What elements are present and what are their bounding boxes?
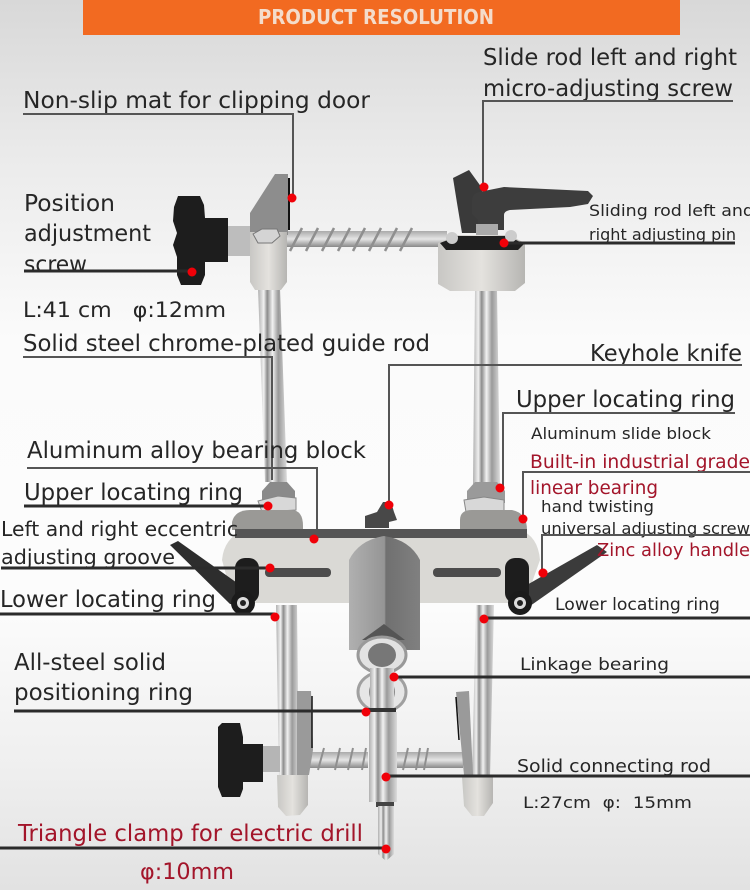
bottom left knob — [218, 723, 280, 797]
right nut stack — [460, 482, 527, 530]
label: zinc alloy handle — [538, 540, 750, 578]
top right slide block — [438, 230, 525, 291]
callout: linear bearing: Built-in industrial grade — [530, 451, 750, 473]
callout: lower locating ring right — [480, 595, 750, 624]
callout: upper locating ring right: Upper locating ring — [516, 387, 735, 413]
header banner — [83, 0, 680, 35]
callout: sliding rod pin: right adjusting pin — [589, 225, 736, 244]
callout: lower locating ring right: Lower locating ring — [555, 595, 720, 615]
callout: solid connecting rod — [382, 756, 750, 782]
spec: upper rod size: L:41 cm φ:12mm — [23, 298, 226, 322]
bottom right clamp and foot — [456, 691, 493, 816]
callout: guide rod: Solid steel chrome-plated guide rod — [23, 331, 430, 357]
left nut stack — [232, 482, 303, 530]
callout: lower locating ring left: Lower locating ring — [0, 587, 216, 613]
central column — [349, 536, 420, 650]
callout: universal adjusting screw: universal adjusting screw — [541, 519, 750, 538]
top right clamp and handle — [453, 170, 593, 242]
callout: non-slip mat — [23, 88, 371, 202]
callout: all-steel positioning ring: All-steel solid — [14, 650, 166, 676]
callout: position adjustment screw: Position — [24, 191, 115, 217]
callout: aluminum alloy bearing block: Aluminum alloy bearing block — [27, 438, 367, 464]
callout: upper locating ring right — [496, 387, 735, 492]
callout: eccentric adjusting groove: adjusting groove — [1, 545, 175, 569]
callout: solid connecting rod: Solid connecting rod — [517, 756, 711, 777]
callout: eccentric adjusting groove: Left and right eccentric — [1, 517, 238, 541]
top left knob — [173, 196, 252, 285]
callout: linear bearing: linear bearing — [530, 477, 658, 499]
callout: aluminum alloy bearing block — [27, 438, 367, 544]
upper right guide rod — [473, 290, 500, 484]
bearing block crossbar — [222, 529, 540, 603]
callout: sliding rod pin — [500, 201, 750, 248]
callout: lower locating ring left — [0, 587, 280, 622]
lower right guide rod — [472, 605, 494, 778]
callout: universal adjusting screw: hand twisting — [541, 497, 654, 516]
keyhole knife — [365, 502, 397, 528]
callout: linear bearing — [518, 451, 750, 524]
callout: universal adjusting screw — [538, 497, 750, 578]
lower left guide rod — [276, 605, 299, 778]
header banner: PRODUCT RESOLUTION — [258, 5, 494, 29]
label: aluminum slide block: Aluminum slide block — [531, 424, 712, 443]
product illustration: mortise jig — [170, 170, 607, 861]
callout: eccentric adjusting groove — [1, 517, 274, 572]
top left clamp and block — [250, 174, 289, 290]
callout: slide rod screw: Slide rod left and right — [483, 45, 737, 71]
callout: all-steel positioning ring: positioning ring — [14, 680, 193, 706]
spec: connecting rod size: L:27cm φ: 15mm — [523, 793, 692, 812]
linkage bearings — [358, 637, 406, 713]
callout: position adjustment screw — [24, 191, 196, 278]
callout: linkage bearing: Linkage bearing — [520, 655, 669, 675]
spec: clamp diameter: φ:10mm — [140, 860, 234, 885]
callout: slide rod screw — [480, 45, 737, 192]
callout: position adjustment screw: screw — [24, 252, 87, 278]
callout: keyhole knife — [384, 341, 742, 510]
label: zinc alloy handle: Zinc alloy handle — [597, 540, 750, 561]
right locking handle — [505, 545, 607, 615]
callout: keyhole knife: Keyhole knife — [590, 341, 742, 367]
callout: all-steel positioning ring — [14, 650, 370, 716]
left locking handle — [170, 541, 259, 615]
callout: linkage bearing — [390, 655, 750, 682]
callout: triangle clamp: Triangle clamp for electric drill — [17, 821, 363, 847]
bottom left clamp and foot — [277, 691, 313, 816]
solid connecting rod — [369, 712, 397, 861]
upper left guide rod — [258, 288, 287, 482]
callout: upper locating ring left: Upper locating ring — [24, 480, 243, 506]
callout: non-slip mat: Non-slip mat for clipping door — [23, 88, 371, 114]
lower threaded screw — [308, 748, 463, 770]
callout: sliding rod pin: Sliding rod left and — [589, 201, 750, 220]
callout: slide rod screw: micro-adjusting screw — [483, 76, 733, 102]
callout: guide rod — [23, 331, 430, 480]
upper threaded screw with spring — [287, 228, 447, 251]
callout: position adjustment screw: adjustment — [24, 221, 151, 247]
